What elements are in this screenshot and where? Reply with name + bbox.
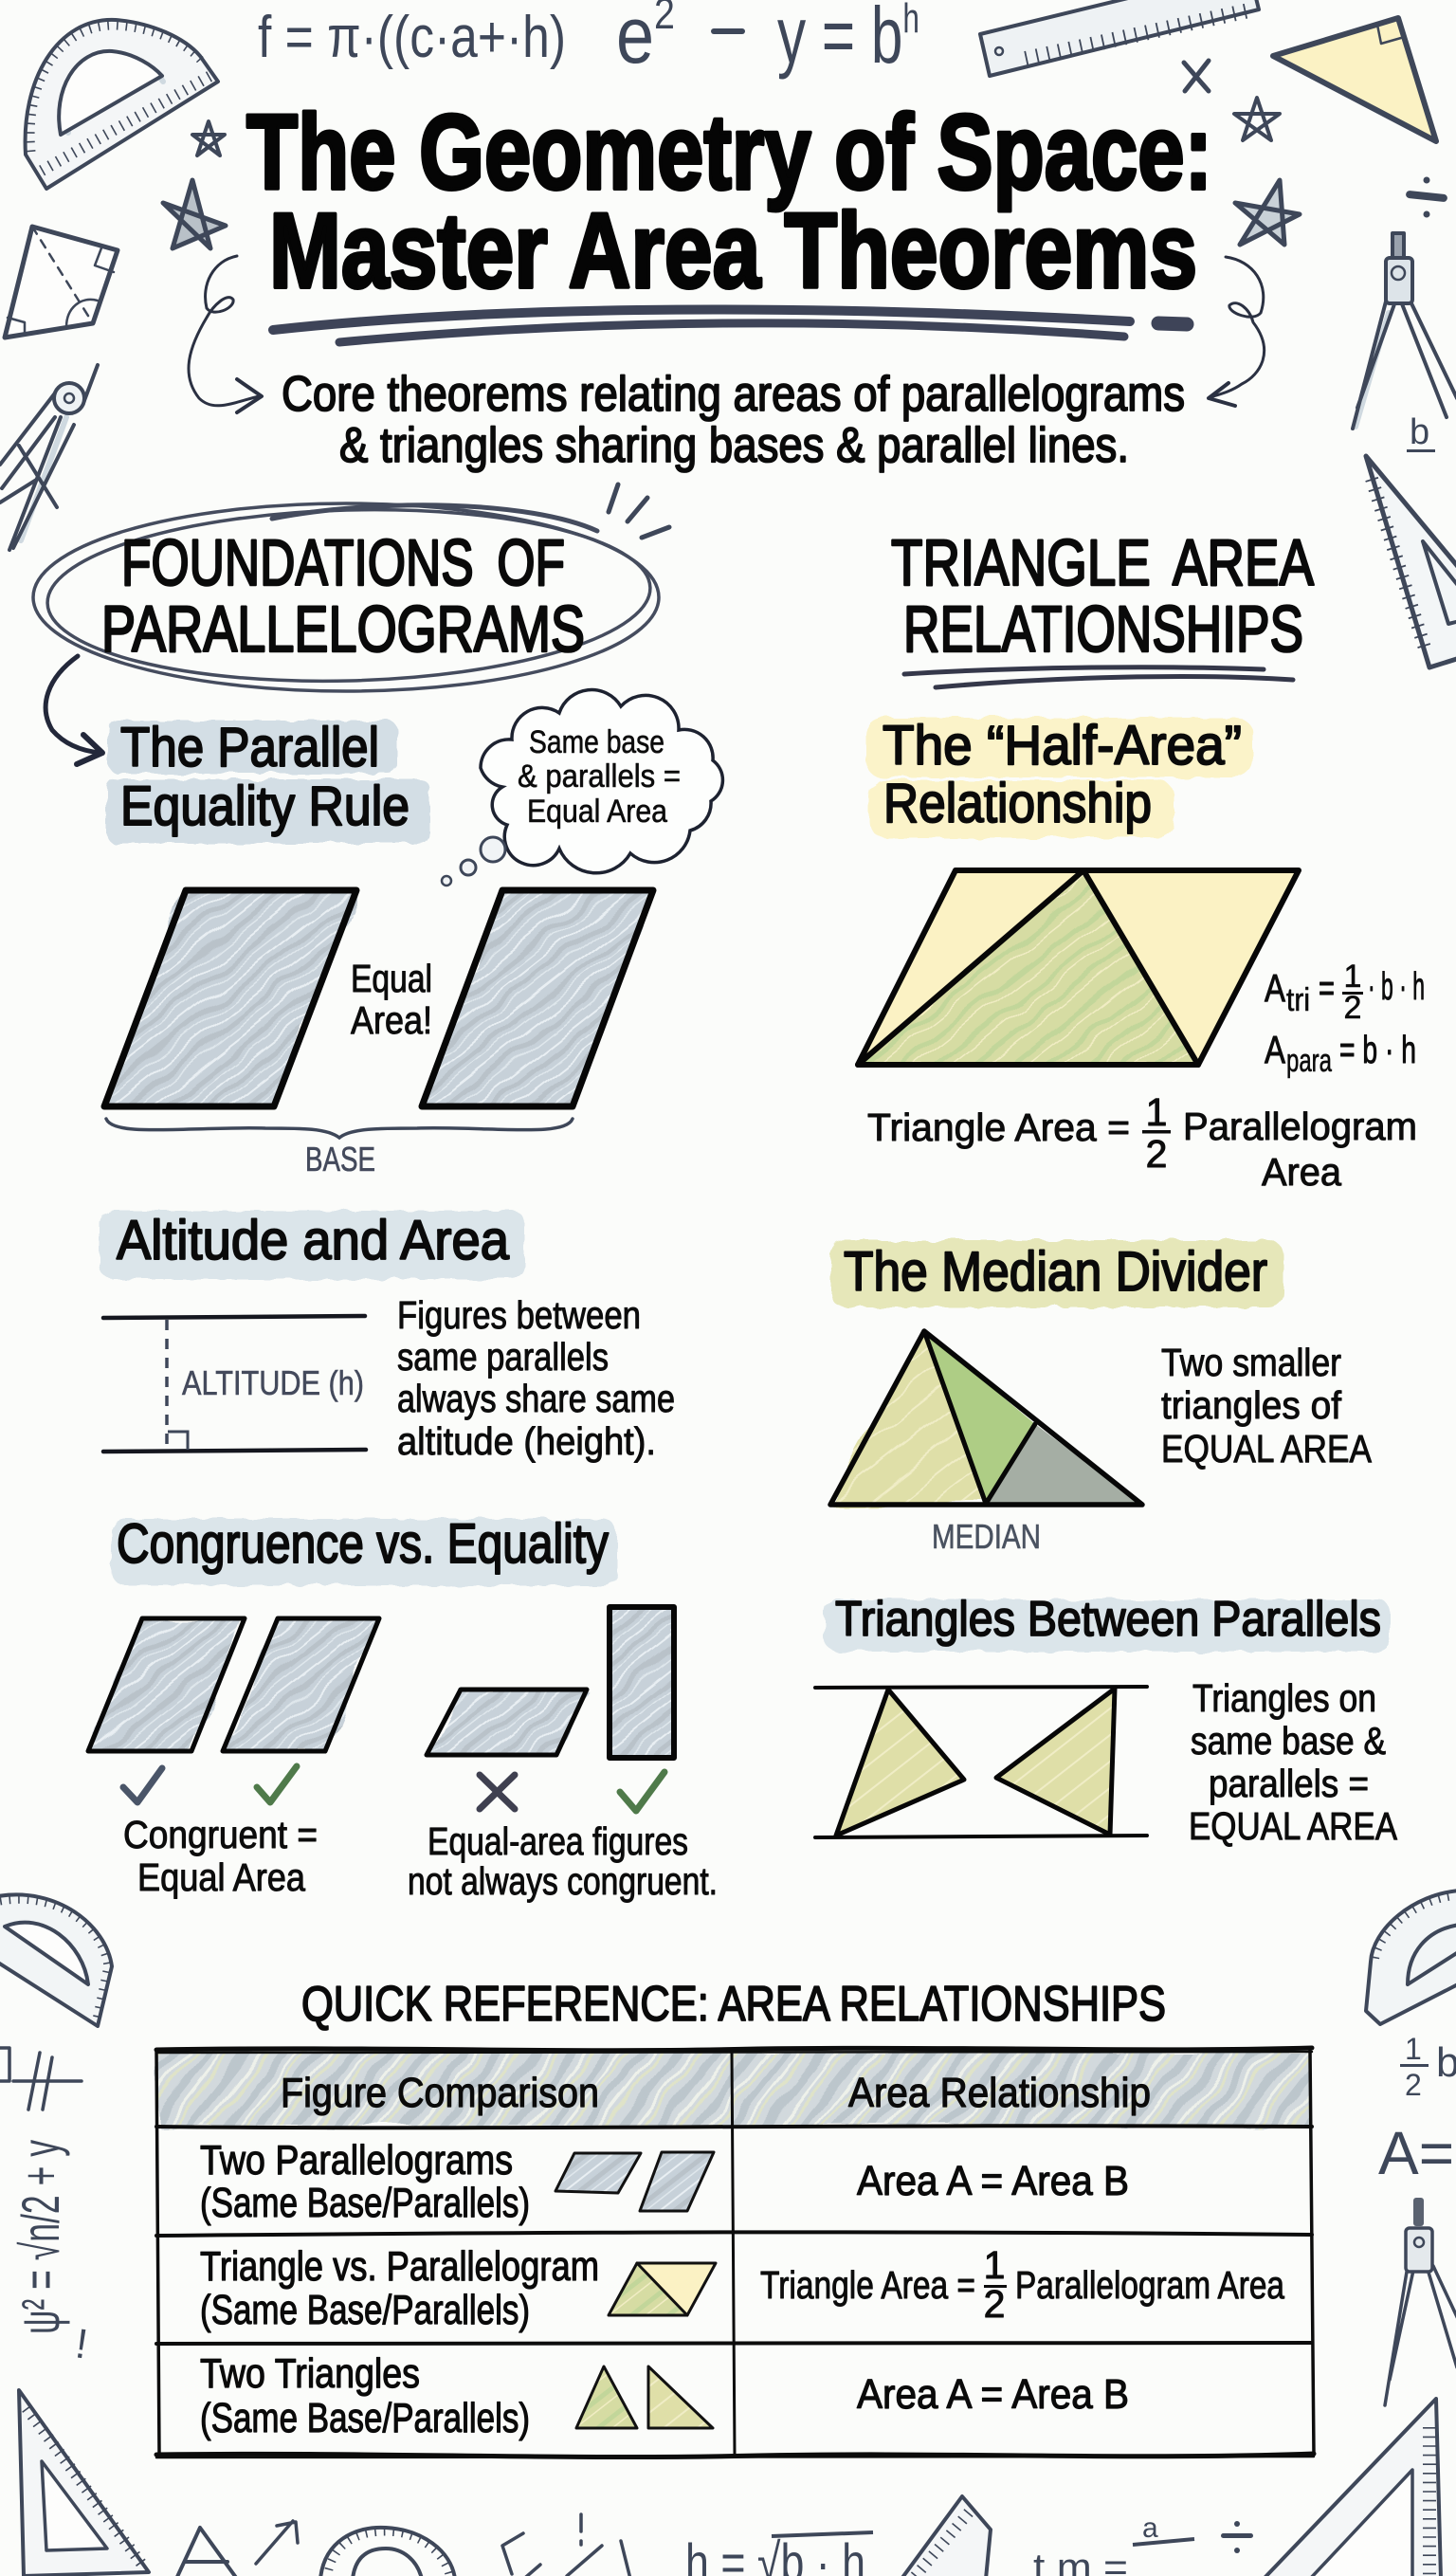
- arrow to parallel equality rule: [46, 656, 102, 764]
- heading underline: [904, 667, 1293, 687]
- icon: set square bottom left: [19, 2390, 149, 2576]
- section heading: FOUNDATIONS OF: [121, 526, 565, 599]
- text: median explanation: Two smaller: [1161, 1341, 1341, 1384]
- formula: scribbles bottom: [502, 2514, 630, 2576]
- subheading: congruence vs equality: Congruence vs. Equality: [117, 1513, 609, 1575]
- formula: triangle area is half parallelogram area: [867, 1090, 1417, 1194]
- table heading: QUICK REFERENCE: AREA RELATIONSHIPS: [301, 1977, 1166, 2032]
- icon: large star left: [163, 180, 226, 248]
- icon: cross: [480, 1775, 515, 1809]
- row: triangle vs parallelogram: Triangle vs. Parallelogram: [200, 2243, 599, 2290]
- subheading: the half-area relationship: The “Half-Area”: [883, 715, 1242, 776]
- icon: yellow set square: [1273, 18, 1436, 141]
- icon: ruler: [980, 0, 1259, 76]
- title underline brush strokes: [273, 309, 1187, 342]
- formula: one half b: 1: [1405, 2032, 1422, 2066]
- icon: check grey: [123, 1768, 162, 1802]
- formula: one half b: [1400, 2032, 1456, 2102]
- title: The Geometry of Space:: [246, 93, 1212, 211]
- text: triangles explanation: EQUAL AREA: [1189, 1804, 1398, 1848]
- decorative doodles: bottom border: [19, 2390, 1441, 2576]
- formula: parallelogram area: [1265, 1028, 1416, 1079]
- formula: triangle area: tri: [1286, 982, 1310, 1018]
- icon: set square bottom right: [1264, 2399, 1441, 2576]
- title: Master Area Theorems: [269, 192, 1197, 310]
- text: median explanation: [1161, 1341, 1373, 1471]
- diagram: two equal parallelograms: Area!: [351, 998, 432, 1042]
- row: two triangles: [200, 2350, 1129, 2441]
- subheading: the half-area relationship: Relationship: [883, 773, 1152, 834]
- formula: t_m fraction: [1033, 2512, 1194, 2576]
- row: two triangles: Area A = Area B: [857, 2371, 1129, 2418]
- icon: check green: [257, 1766, 297, 1802]
- formula: minus sign: [711, 28, 745, 34]
- row: two parallelograms: Area A = Area B: [857, 2158, 1129, 2204]
- label: median: MEDIAN: [932, 1517, 1041, 1556]
- table header labels: [281, 2070, 1151, 2116]
- thought bubble callout: Equal Area: [527, 794, 667, 830]
- table header labels: Figure Comparison: [281, 2070, 599, 2116]
- section heading: [101, 526, 585, 666]
- row: triangle vs parallelogram: Triangle Area =: [760, 2263, 975, 2307]
- section heading: PARALLELOGRAMS: [101, 593, 585, 666]
- diagram: median triangle: [830, 1331, 1142, 1505]
- icon: compass point bottom: [176, 2528, 237, 2576]
- icon: protractor top left: [26, 20, 218, 189]
- diagram: two equal parallelograms: Equal: [351, 957, 432, 1000]
- icon: large star right: [1235, 180, 1300, 245]
- subheading: the median divider: The Median Divider: [844, 1241, 1267, 1303]
- text: equal-area caption: not always congruent.: [408, 1859, 718, 1903]
- row: triangle vs parallelogram: 1: [984, 2243, 1005, 2287]
- icon: letter x: [1184, 61, 1209, 91]
- heading ellipse scribble: [33, 502, 659, 691]
- icon: compass lower right: [1385, 2198, 1456, 2405]
- formula: triangle area is half parallelogram area: Parallelogram: [1183, 1105, 1417, 1148]
- section heading: TRIANGLE AREA: [891, 526, 1314, 599]
- row: two parallelograms: [200, 2137, 1129, 2226]
- text: triangles explanation: Triangles on: [1192, 1676, 1376, 1720]
- diagram: triangle inside parallelogram: [858, 870, 1299, 1065]
- row: triangle vs parallelogram: (Same Base/Parallels): [200, 2287, 530, 2333]
- burst marks: [609, 484, 669, 538]
- section heading: [891, 526, 1314, 666]
- formula: one half b: 2: [1405, 2068, 1422, 2102]
- subtitle: Core theorems relating areas of parallelograms: [282, 367, 1185, 422]
- decorative doodles: top border: [26, 0, 1436, 248]
- text: median explanation: EQUAL AREA: [1161, 1427, 1373, 1471]
- section heading: RELATIONSHIPS: [903, 593, 1303, 666]
- text: congruent caption: Equal Area: [137, 1855, 305, 1899]
- text: altitude explanation: [397, 1293, 675, 1463]
- table header shading: [158, 2052, 1310, 2127]
- icon: check green 2: [620, 1772, 664, 1811]
- diagram: two equal parallelograms: [104, 890, 653, 1106]
- formula: triangle area: 1: [1344, 959, 1361, 995]
- decorative doodles: sides of table: [0, 1891, 1456, 2405]
- formula: f = pi: f = π·((c·a+·h): [258, 5, 566, 70]
- text: equal-area caption: [408, 1819, 718, 1903]
- diagram: congruent parallelograms: [88, 1618, 379, 1751]
- diagram: equal-area figures: [427, 1607, 674, 1758]
- icon: protractor lower right: [1366, 1891, 1456, 2024]
- text: altitude explanation: same parallels: [397, 1335, 609, 1379]
- thought bubble callout: Same base: [529, 724, 664, 760]
- text: altitude explanation: Figures between: [397, 1293, 641, 1337]
- panel: quick reference table: [156, 1977, 1314, 2458]
- formula: parallelogram area: para: [1286, 1043, 1332, 1079]
- subheading: triangles between parallels: Triangles Between Parallels: [835, 1592, 1381, 1647]
- icon: division sign bottom: [1221, 2521, 1253, 2553]
- text: triangles explanation: same base &: [1191, 1719, 1386, 1763]
- decorative doodles: left and right of header: [0, 176, 1456, 667]
- icon: protractor bottom: [320, 2528, 455, 2576]
- diagram: triangles between parallel lines: [815, 1687, 1147, 1837]
- table header labels: Area Relationship: [848, 2070, 1151, 2116]
- formula: letter b underlined: b: [1410, 412, 1429, 452]
- text: equal-area caption: Equal-area figures: [428, 1819, 688, 1863]
- subtitle: & triangles sharing bases & parallel lines.: [339, 418, 1129, 473]
- panel: triangle area relationships: [815, 526, 1425, 1848]
- base brace and label: [106, 1119, 573, 1178]
- icon: small star right: [1234, 98, 1280, 140]
- text: altitude explanation: always share same: [397, 1377, 675, 1420]
- icon: small arrow bottom: [256, 2521, 298, 2564]
- arrow: left swirl to subtitle: [189, 256, 262, 412]
- formula: A equals: A=: [1378, 2119, 1454, 2187]
- formula: exclamation mark: !: [73, 2320, 91, 2368]
- row: two parallelograms: Two Parallelograms: [200, 2137, 513, 2183]
- text: congruent caption: [123, 1813, 318, 1899]
- text: congruent caption: Congruent =: [123, 1813, 318, 1856]
- formula: triangle area: A: [1265, 966, 1286, 1010]
- row: two parallelograms: (Same Base/Parallels): [200, 2180, 530, 2226]
- subheading: altitude and area: Altitude and Area: [117, 1210, 510, 1271]
- thought bubble callout: & parallels =: [518, 758, 681, 795]
- diagram: altitude between parallels: ALTITUDE (h): [182, 1363, 364, 1402]
- text: median explanation: triangles of: [1161, 1383, 1342, 1427]
- formula: t_m fraction: a: [1142, 2512, 1158, 2544]
- formula: parallelogram area: = b · h: [1339, 1028, 1416, 1071]
- icon: division sign: [1406, 176, 1447, 218]
- formula: rotated left margin equation: ψ² = √n/2 + y: [10, 2140, 70, 2334]
- row: two triangles: Two Triangles: [200, 2350, 420, 2397]
- icon: compass left: [0, 365, 98, 550]
- icon: quadrilateral with angle marks: [5, 227, 118, 338]
- formula: triangle area is half parallelogram area: 2: [1146, 1132, 1167, 1176]
- thought bubble callout: [442, 689, 722, 886]
- icon: set square bottom centre: [901, 2496, 991, 2576]
- row: triangle vs parallelogram: 2: [984, 2282, 1005, 2326]
- formula: parallelogram area: A: [1265, 1028, 1286, 1071]
- subheading: the parallel equality rule: The Parallel: [120, 717, 379, 778]
- subheading: the parallel equality rule: Equality Rule: [120, 776, 410, 837]
- text: triangles explanation: parallels =: [1209, 1762, 1369, 1805]
- diagram: altitude between parallels: [103, 1316, 366, 1452]
- icon: compass right: [1353, 233, 1456, 429]
- formula: triangle area: [1265, 959, 1425, 1026]
- title: [246, 93, 1212, 310]
- formula: triangle area: =: [1319, 966, 1335, 1010]
- row: triangle vs parallelogram: Parallelogram Area: [1015, 2263, 1284, 2307]
- formula: triangle area is half parallelogram area: 1: [1146, 1090, 1167, 1134]
- row: triangle vs parallelogram: [200, 2243, 1284, 2333]
- subheading: the parallel equality rule: [107, 717, 429, 844]
- icon: small star left: [192, 121, 225, 155]
- table grid: [156, 2048, 1314, 2458]
- text: triangles explanation: [1189, 1676, 1398, 1848]
- panel: foundations of parallelograms: [33, 484, 722, 1903]
- formula: triangle area is half parallelogram area: Triangle Area =: [867, 1105, 1130, 1149]
- arrow: right swirl to subtitle: [1209, 257, 1265, 406]
- text: altitude explanation: altitude (height).: [397, 1419, 656, 1463]
- formula: scribbled hash: [0, 2048, 82, 2110]
- base brace and label: BASE: [305, 1140, 375, 1178]
- formula: triangle area: 2: [1344, 990, 1361, 1026]
- icon: set square right: [1366, 456, 1456, 667]
- subtitle: [282, 367, 1185, 473]
- subheading: the half-area relationship: [865, 715, 1253, 838]
- formula: triangle area is half parallelogram area: Area: [1262, 1150, 1341, 1194]
- row: two triangles: (Same Base/Parallels): [200, 2395, 530, 2441]
- icon: protractor lower left: [0, 1894, 112, 2026]
